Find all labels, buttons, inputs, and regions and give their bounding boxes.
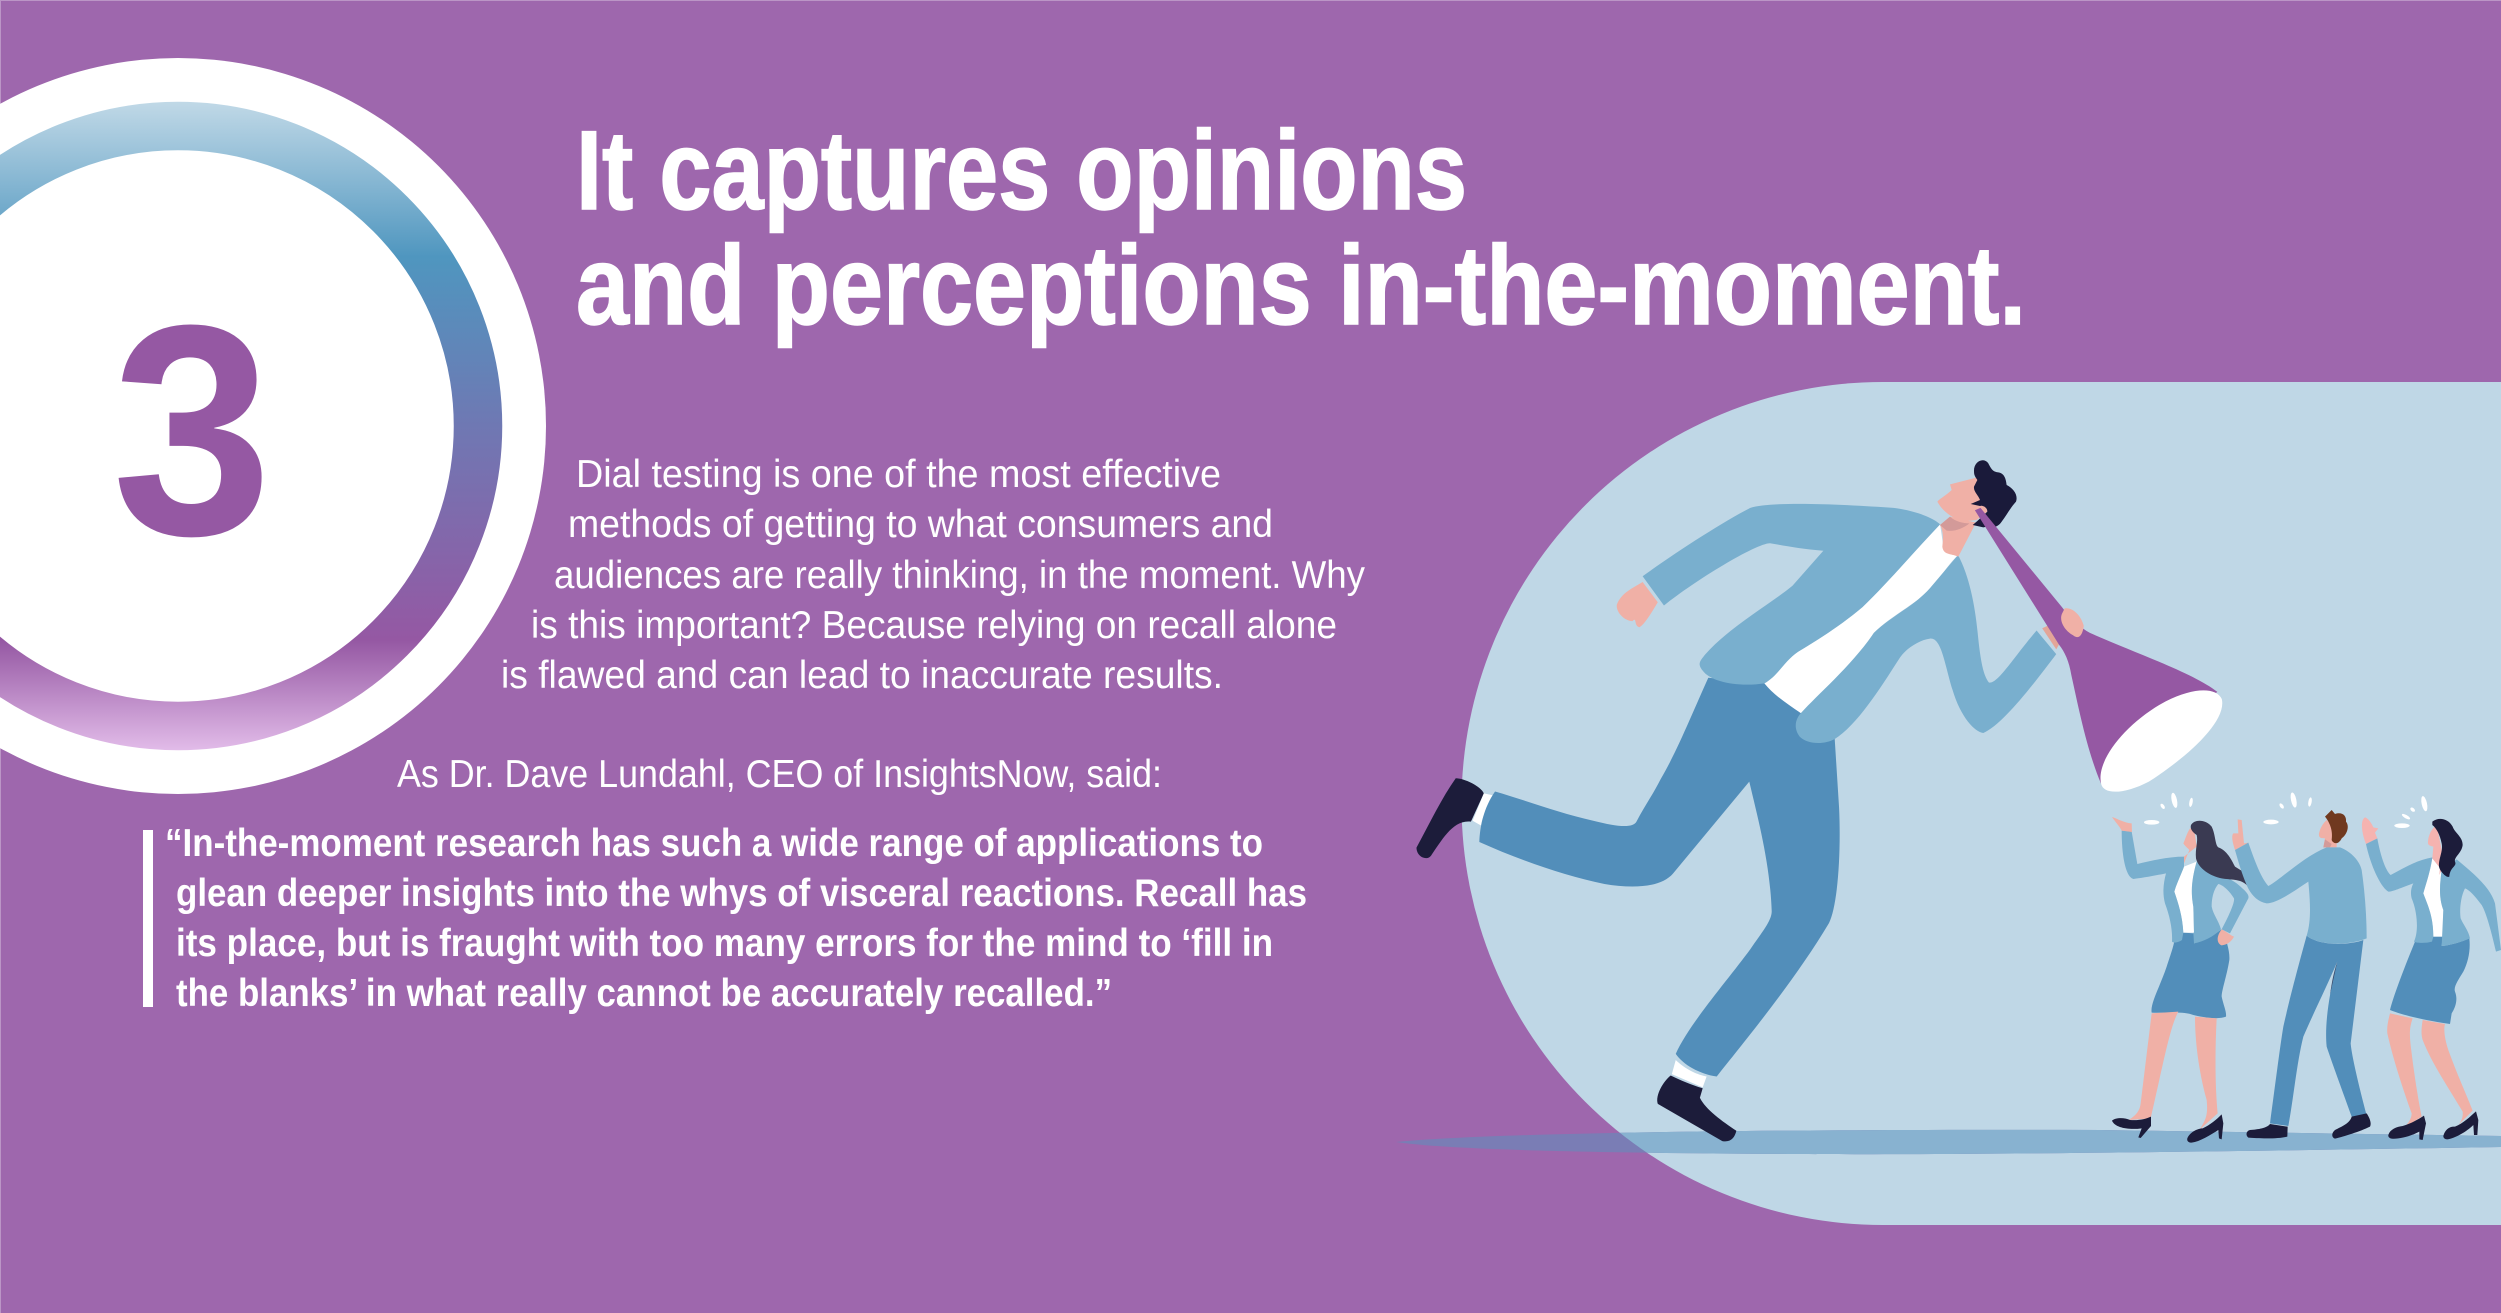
neck, face and hand [2362,817,2442,875]
surprise marks [2144,792,2429,828]
hair [2191,821,2257,889]
body paragraph: Dial testing is one of the most effective [576,453,1221,496]
hair [2432,819,2463,877]
man: neck shadow [1940,517,1969,531]
ground shadow [1396,1130,2501,1154]
body paragraph: is this important? Because relying on recall alone [531,604,1337,647]
man: trousers [1479,678,1840,1077]
skirt [2151,929,2229,1018]
body paragraph [501,453,1365,697]
trouser shadow [2330,962,2337,995]
neck shadow [2323,839,2332,847]
attribution line: As Dr. Dave Lundahl, CEO of InsightsNow, said: [397,753,1162,796]
sweater [2235,843,2367,944]
title: and perceptions in-the-moment. [576,223,2026,348]
megaphone body [1975,508,2217,784]
illustration panel [1462,382,2501,1225]
body paragraph: methods of getting to what consumers and [568,503,1273,546]
jacket [2122,831,2249,943]
shoes [2388,1111,2478,1140]
shoes [2247,1113,2371,1139]
woman 3 [2362,817,2501,1140]
running man with megaphone [1416,460,2222,1141]
quote bar [143,830,153,1007]
man: shirt [1764,524,1958,713]
man: back hand [1617,582,1658,627]
megaphone opening [2100,690,2222,792]
man: upper hand [2061,608,2084,637]
numbered circle badge [0,58,546,794]
legs [2387,1013,2473,1128]
man: jacket left [1643,504,1940,685]
man: face [1937,477,1987,522]
man: front sock [1672,1060,1707,1087]
title [576,108,2026,348]
man: front shoe [1657,1076,1736,1141]
jacket [2366,838,2501,952]
man: head [1937,460,2017,557]
listeners group [2112,792,2501,1143]
man: hair [1971,460,2017,527]
man: jacket right [1796,555,2056,743]
skirt [2390,937,2470,1024]
body paragraph: is flawed and can lead to inaccurate results. [501,654,1223,697]
quote text: “In-the-moment research has such a wide range of applications to [165,822,1263,865]
man: lower hand [2042,624,2060,649]
man: neck [1940,517,1976,557]
quote text: glean deeper insights into the whys of visceral reactions. Recall has [176,872,1307,915]
shirt [2423,858,2443,937]
man 2 [2232,810,2371,1139]
number 3: 3 [112,262,272,598]
title: It captures opinions [576,108,1467,233]
quote text: its place, but is fraught with too many errors for the mind to ‘fill in [176,922,1273,965]
legs [2129,1012,2218,1129]
quote text [165,822,1307,1015]
woman 1 [2112,817,2257,1143]
man: back shoe [1416,778,1484,858]
shirt [2174,862,2197,933]
trousers [2270,936,2367,1126]
man: back sock [1473,793,1495,825]
hands, neck and face [2112,817,2234,945]
hair [2325,810,2348,843]
shoes [2112,1114,2223,1143]
quote text: the blanks’ in what really cannot be accurately recalled.” [176,972,1112,1015]
body paragraph: audiences are really thinking, in the moment. Why [554,554,1365,597]
neck and face [2232,819,2337,850]
